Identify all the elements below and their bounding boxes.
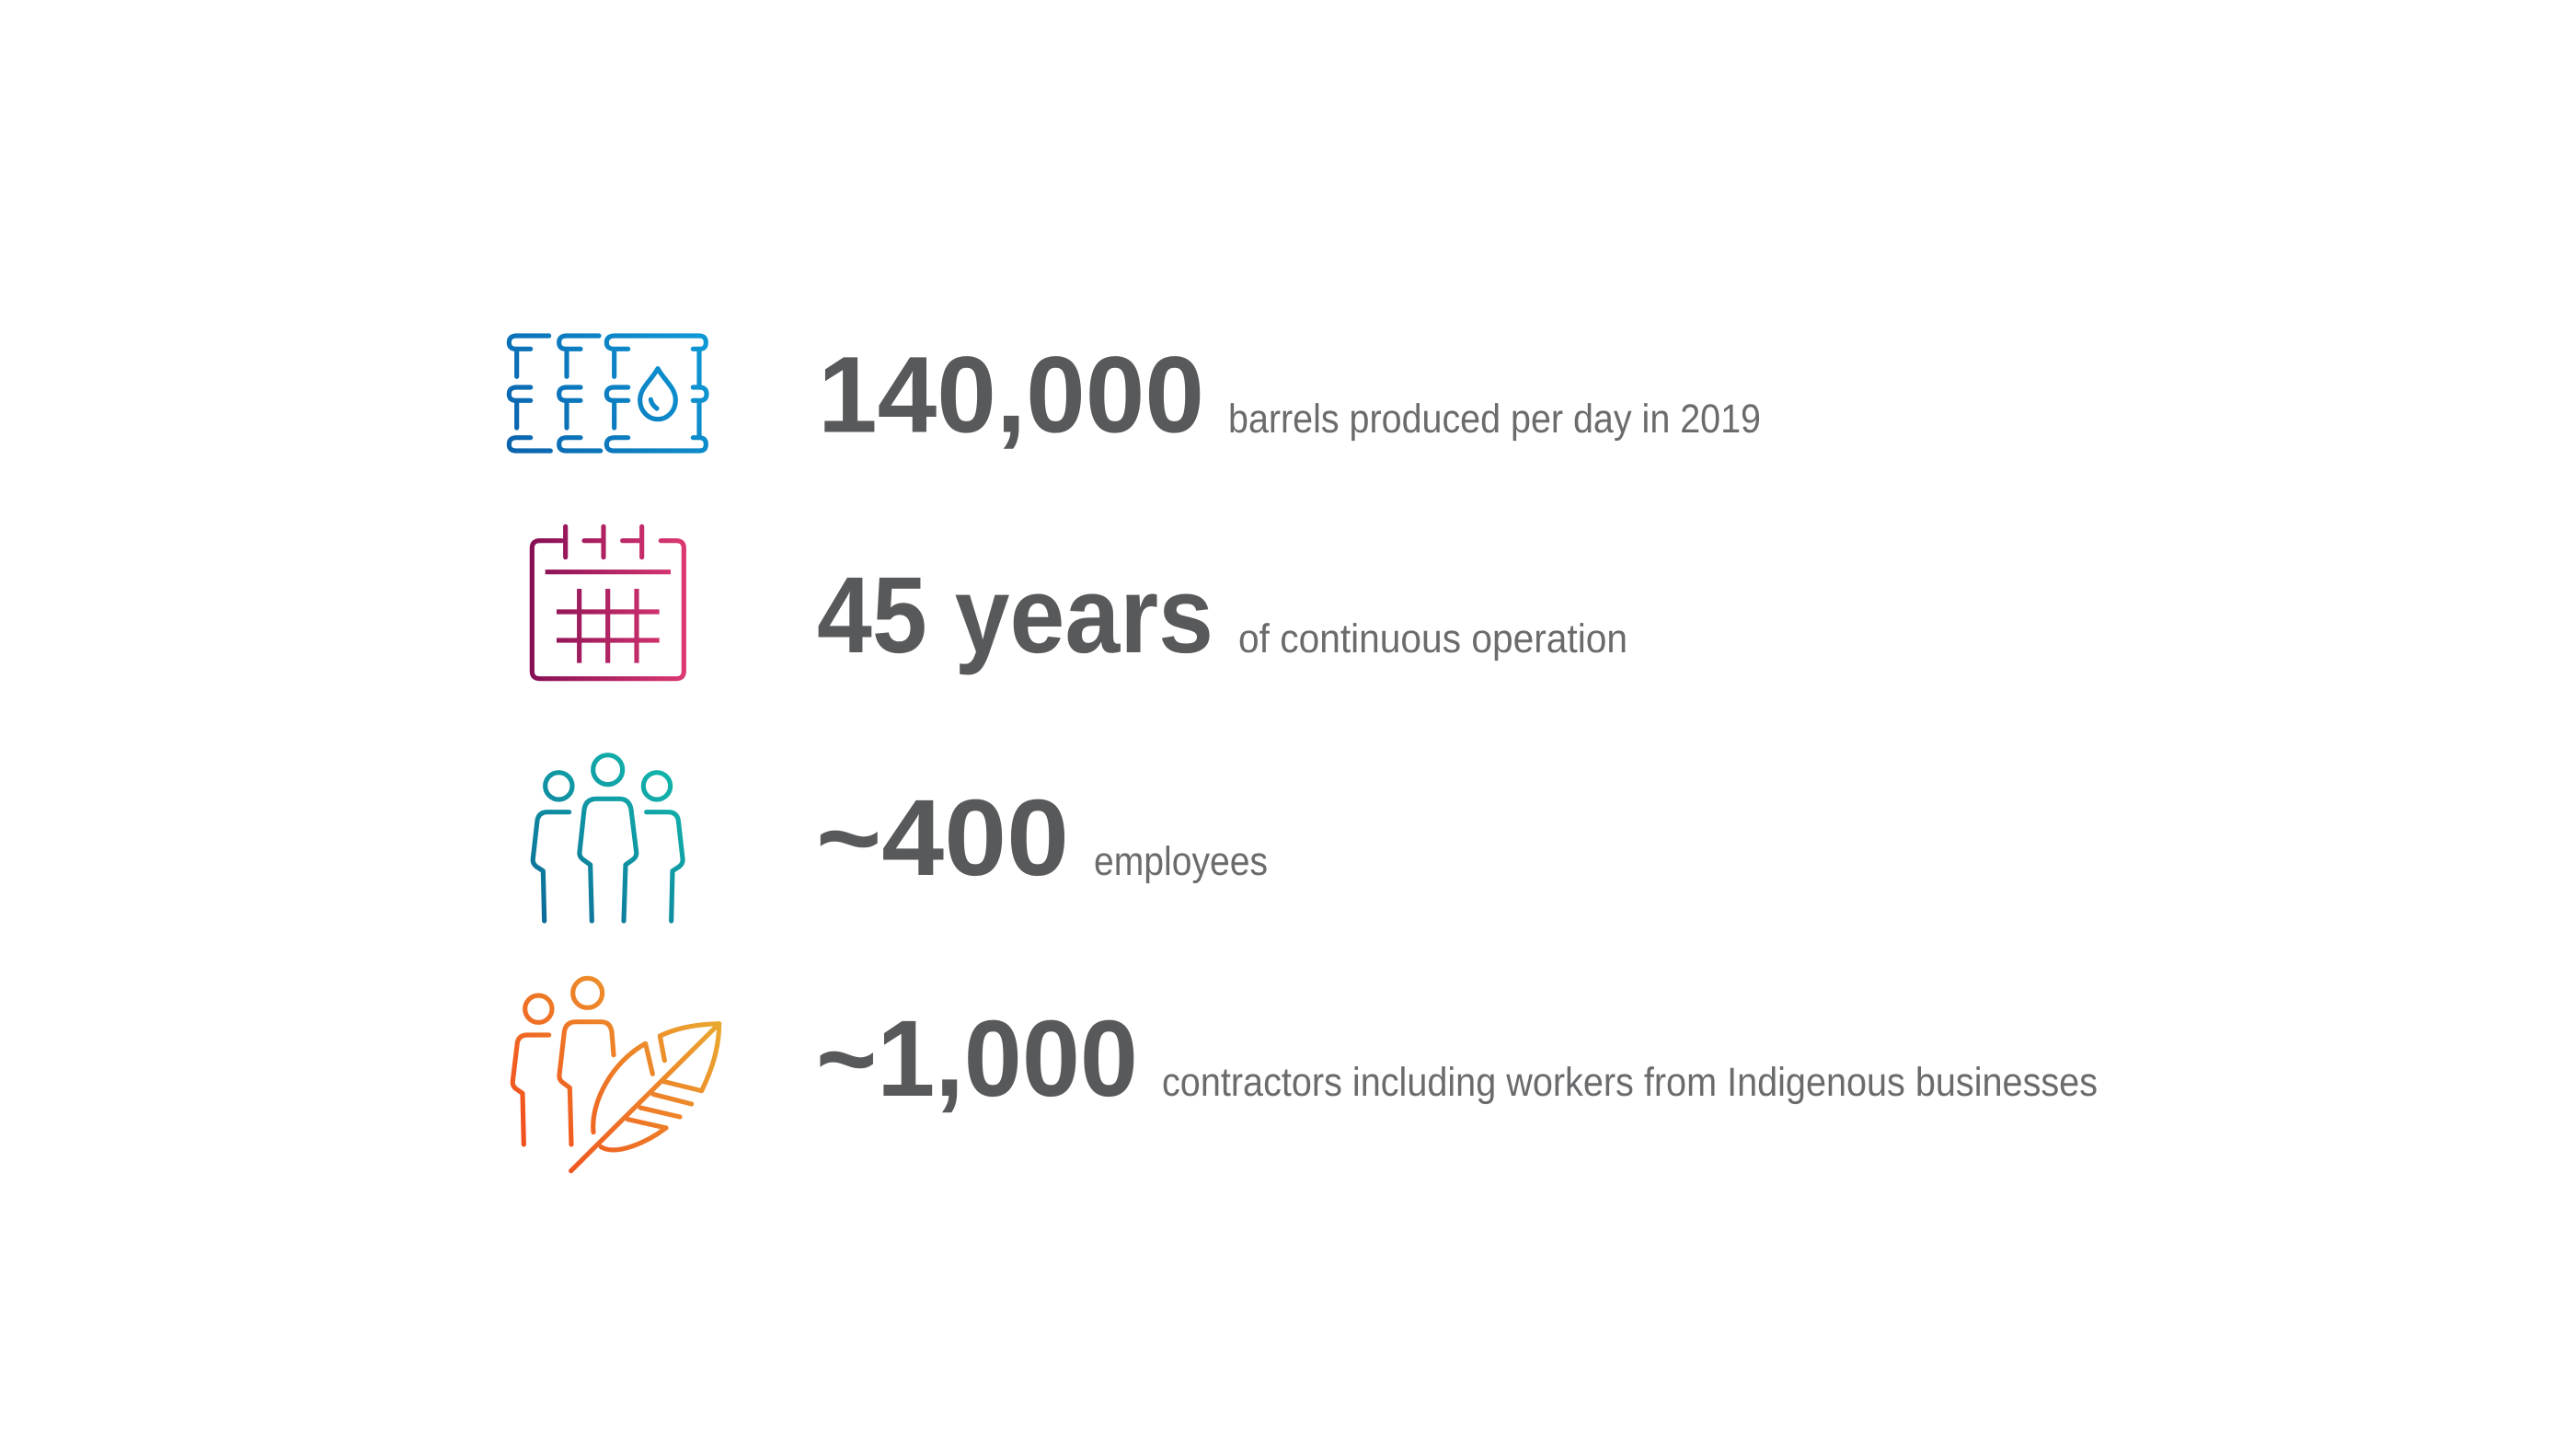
panel: years stat row xyxy=(532,526,1627,679)
icon: oil barrels with drop xyxy=(509,336,707,451)
stat label: barrels: barrels produced per day in 2019 xyxy=(1228,397,1761,442)
stat label: operation: of continuous operation xyxy=(1238,616,1627,661)
stat value: 140,000: 140,000 xyxy=(818,335,1204,456)
stat label: employees: employees xyxy=(1094,839,1268,884)
icon: three people xyxy=(533,755,683,921)
panel: employees stat row xyxy=(533,755,1268,921)
stat label: contractors: contractors including workers from Indigenous businesses xyxy=(1162,1060,2098,1105)
panel: barrels stat row xyxy=(509,335,1761,456)
stat value: ~1,000: ~1,000 xyxy=(816,998,1138,1120)
icon: calendar xyxy=(532,526,684,679)
icon: people with feather xyxy=(512,978,719,1171)
panel: contractors stat row xyxy=(512,978,2098,1171)
stat value: 45 years: 45 years xyxy=(817,555,1213,676)
stat value: ~400: ~400 xyxy=(816,777,1069,899)
